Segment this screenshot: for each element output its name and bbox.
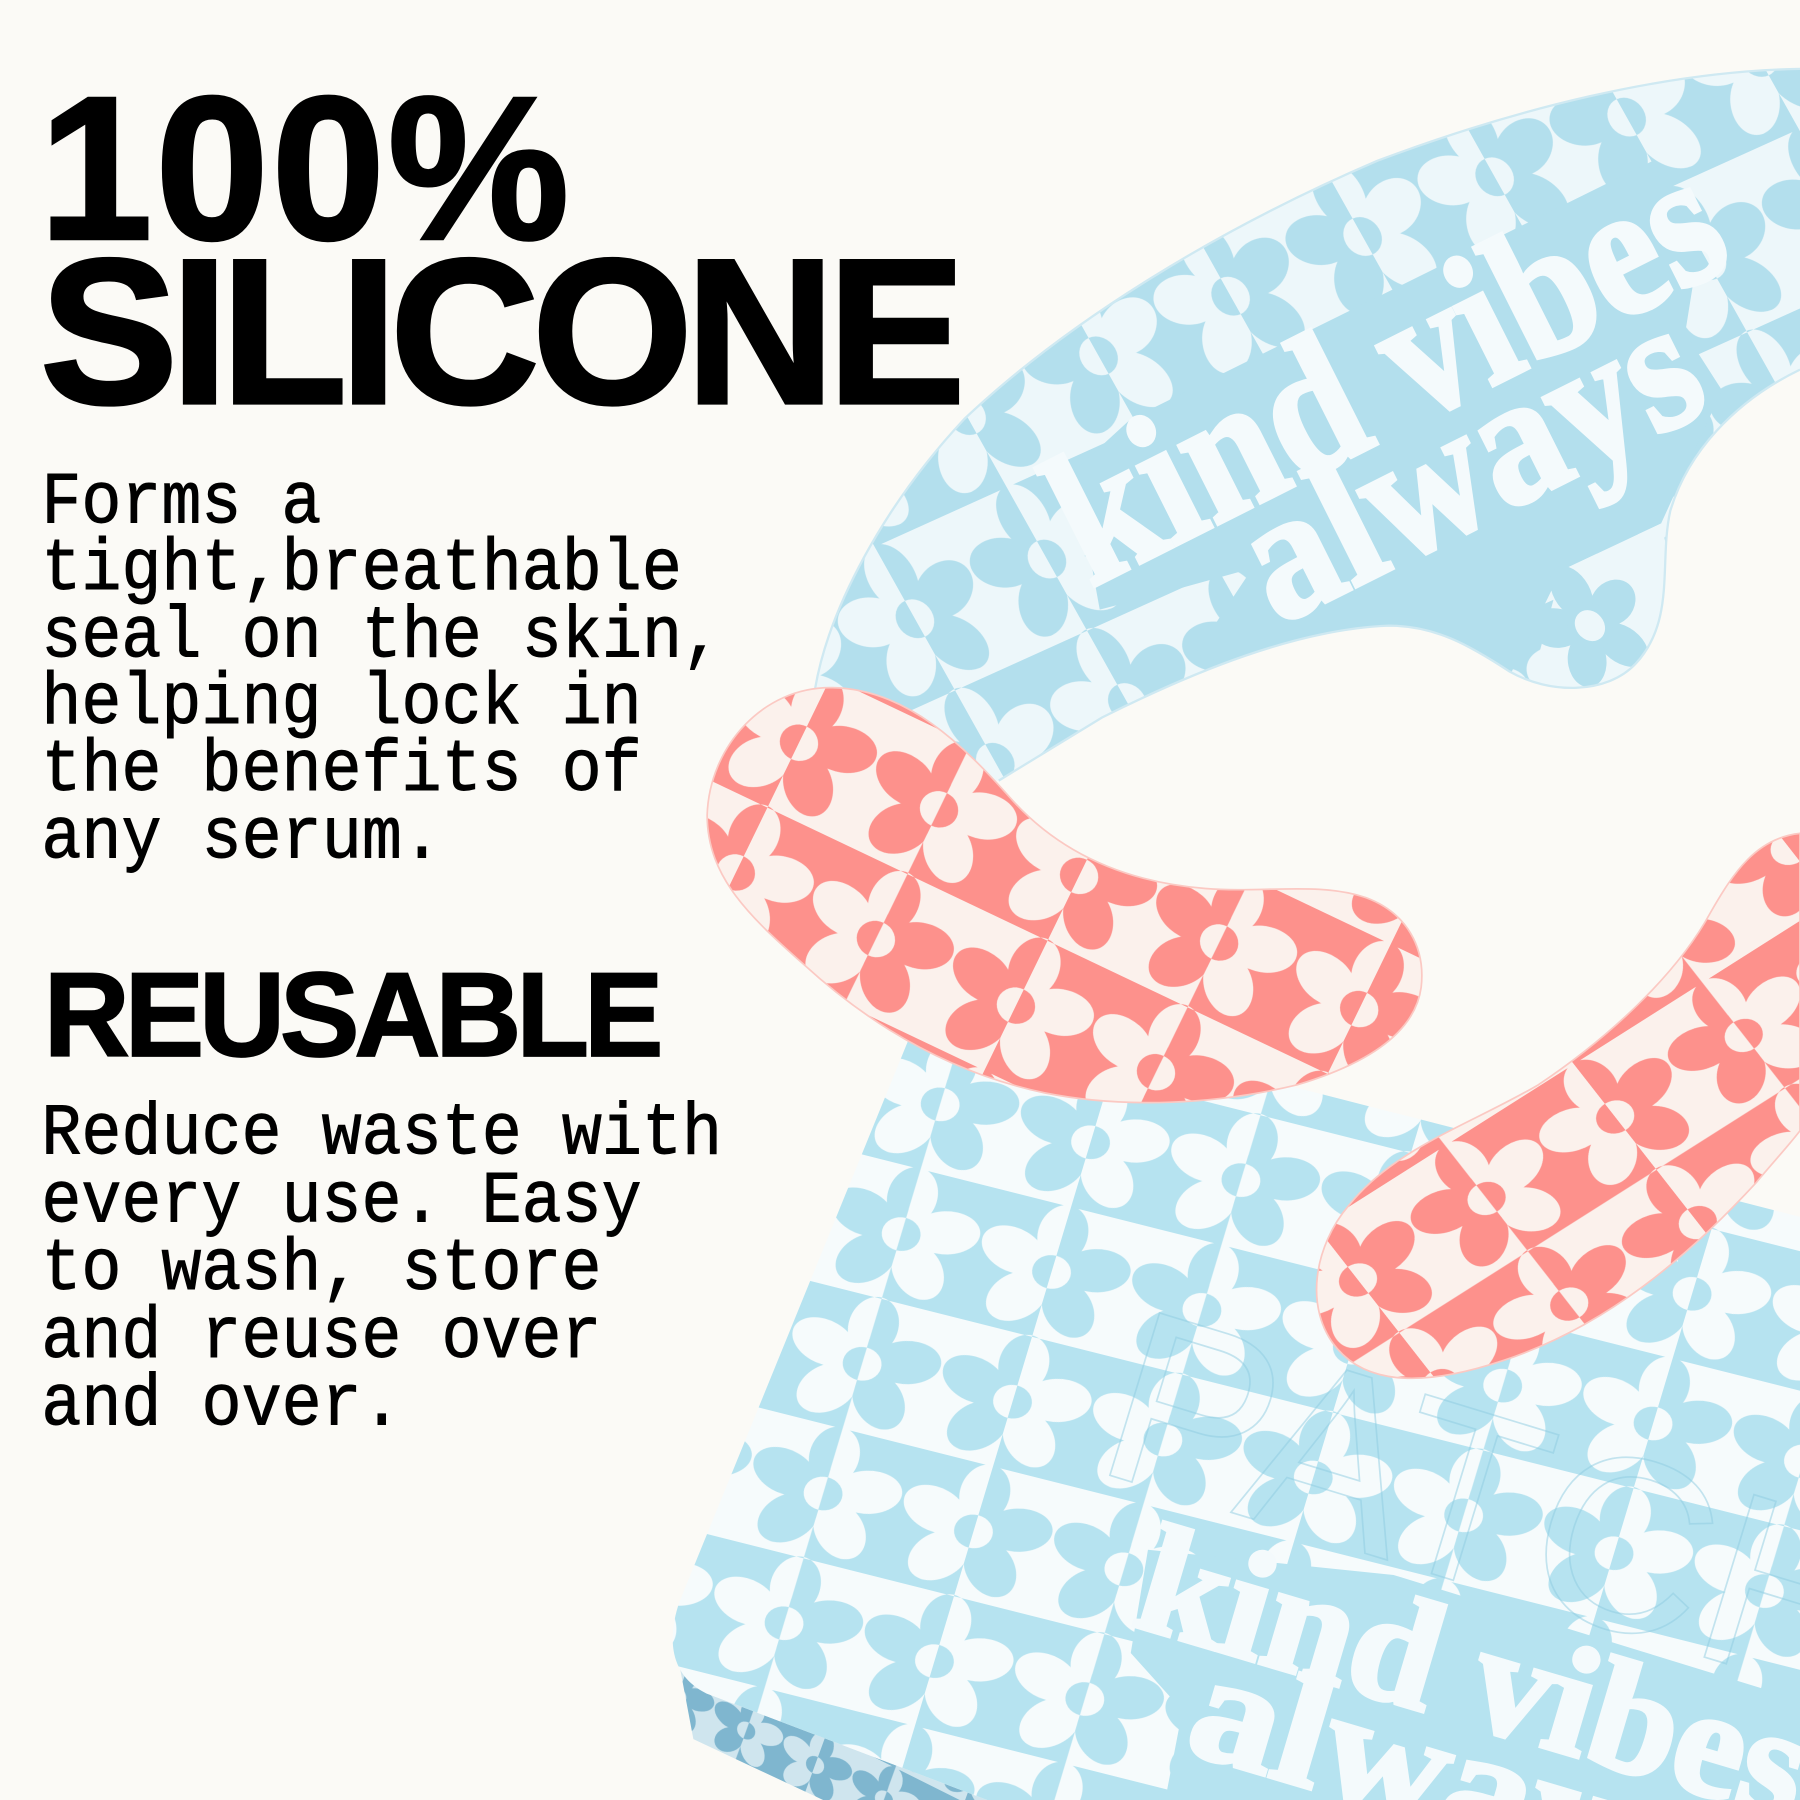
body text: reduce waste: every use. Easy (41, 1161, 642, 1244)
tin lid surface (673, 993, 1800, 1800)
left pink under-eye patch (707, 688, 1422, 1103)
body text: reduce waste (41, 1094, 722, 1448)
body text: forms a seal: any serum. (41, 798, 442, 881)
title: 100% SILICONE: SILICONE (40, 216, 965, 447)
tin side edge (675, 1642, 987, 1800)
title: 100% SILICONE (39, 55, 965, 447)
mask tail flower block (1540, 524, 1665, 686)
body text: reduce waste: to wash, store (41, 1229, 602, 1312)
blue silicone mask (804, 57, 1800, 792)
body text: forms a seal: tight,breathable (41, 529, 682, 612)
mask slogan panel (1089, 162, 1721, 672)
body text: reduce waste: and over. (41, 1365, 402, 1448)
body text: reduce waste: and reuse over (41, 1297, 602, 1380)
body text: reduce waste: Reduce waste with (41, 1094, 722, 1177)
title: 100% SILICONE: 100% (39, 55, 569, 283)
right pink under-eye patch (1317, 833, 1800, 1378)
body text: forms a seal (41, 462, 722, 881)
mask edge (815, 69, 1800, 781)
heading: REUSABLE: REUSABLE (44, 949, 664, 1082)
body text: forms a seal: seal on the skin, (41, 597, 722, 680)
body text: forms a seal: helping lock in (41, 663, 642, 746)
product tin with flower pattern (673, 993, 1800, 1800)
mask slogan: always: always (1204, 261, 1732, 661)
body text: forms a seal: Forms a (41, 462, 321, 545)
mask flower pattern (804, 57, 1800, 792)
body text: forms a seal: the benefits of (41, 730, 642, 813)
